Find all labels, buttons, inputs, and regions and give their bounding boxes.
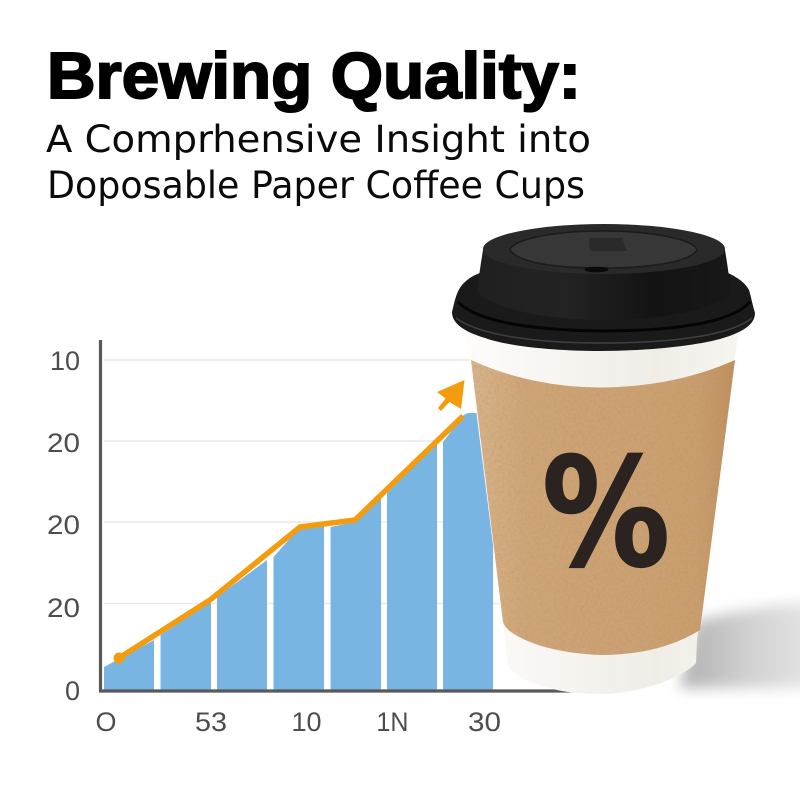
cup paper body — [466, 330, 739, 694]
rim groove — [458, 302, 750, 331]
percent symbol: % — [542, 426, 670, 601]
lid recess — [510, 231, 697, 268]
axes — [100, 340, 575, 691]
x axis labels: 10 — [291, 707, 322, 737]
bars — [104, 413, 493, 691]
grid lines — [104, 360, 500, 604]
kraft sleeve — [471, 360, 735, 655]
x axis labels: 1N — [376, 707, 408, 737]
y axis labels: 20 — [47, 428, 80, 458]
lid tab — [589, 238, 627, 251]
lid dome — [477, 225, 731, 320]
y axis labels: 20 — [47, 593, 80, 623]
x axis labels: O — [95, 707, 117, 737]
cup shadow — [680, 602, 800, 688]
heading: Brewing Quality: Brewing Quality: — [47, 39, 581, 112]
lid top face — [483, 224, 725, 274]
y axis labels — [47, 346, 80, 706]
x axis labels: 30 — [468, 707, 501, 737]
y axis labels: 10 — [50, 346, 80, 376]
trend line — [119, 416, 463, 658]
lid — [452, 224, 755, 351]
arrow — [437, 380, 464, 411]
sip hole — [584, 267, 608, 272]
title — [46, 39, 591, 207]
subtitle line 1: A Comprhensive Insight into — [46, 118, 591, 161]
lid outer rim — [452, 272, 755, 351]
subtitle line 2: Doposable Paper Coffee Cups — [47, 164, 585, 207]
chart — [47, 340, 575, 737]
x axis labels — [95, 707, 501, 737]
y axis labels: 0 — [65, 676, 80, 706]
coffee cup — [452, 224, 755, 694]
y axis labels: 20 — [47, 510, 80, 540]
x axis labels: 53 — [195, 707, 227, 737]
trend start dot — [114, 652, 124, 664]
rim highlight — [456, 318, 752, 343]
